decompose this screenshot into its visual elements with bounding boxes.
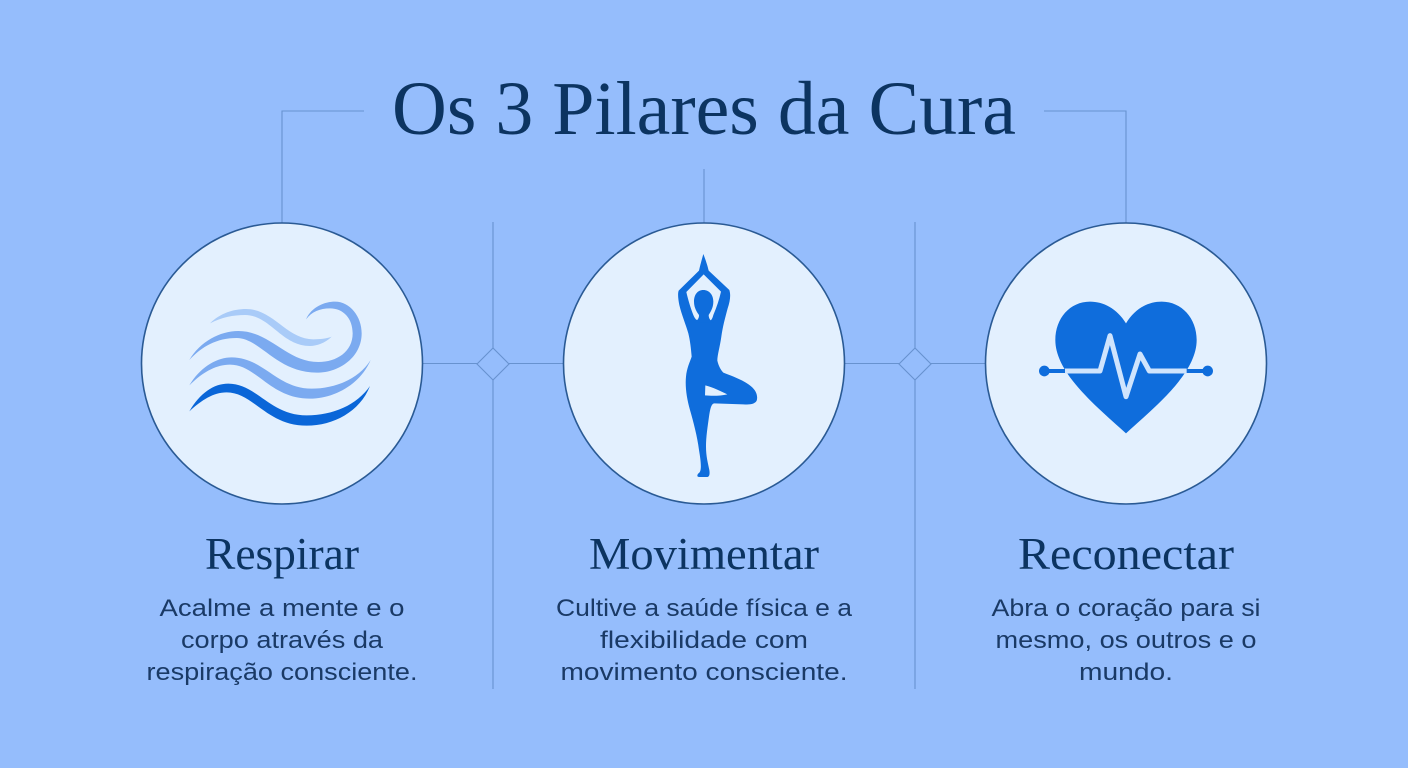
heading: Movimentar: Movimentar <box>589 529 819 579</box>
circle: Reconectar <box>986 223 1266 504</box>
title: Os 3 Pilares da Cura <box>392 67 1016 151</box>
text: Respirar description: Acalme a mente e o <box>160 595 404 622</box>
text: Reconectar description: Abra o coração para si <box>992 595 1260 622</box>
text: Movimentar description: flexibilidade com <box>600 627 808 654</box>
text: Reconectar description <box>992 595 1260 686</box>
text: Respirar description: corpo através da <box>181 627 384 654</box>
text: Movimentar description: Cultive a saúde física e a <box>556 595 853 622</box>
circle: Respirar <box>142 223 422 504</box>
diamond: left divider <box>477 348 509 380</box>
text: Reconectar description: mesmo, os outros e o <box>996 627 1256 654</box>
panel: Respirar <box>142 223 422 686</box>
heading: Respirar: Respirar <box>205 529 359 579</box>
circle: Movimentar <box>564 223 844 504</box>
panel: Movimentar <box>556 223 853 686</box>
heading: Reconectar: Reconectar <box>1018 529 1234 579</box>
text: Movimentar description: movimento consciente. <box>560 659 848 686</box>
text: Respirar description: respiração consciente. <box>146 659 418 686</box>
icon: waves <box>189 302 371 426</box>
text: Respirar description <box>146 595 418 686</box>
connector lines <box>282 111 1126 689</box>
panel: Reconectar <box>986 223 1266 686</box>
icon: heart with pulse <box>1039 302 1213 433</box>
text: Reconectar description: mundo. <box>1079 659 1173 686</box>
text: Movimentar description <box>556 595 853 686</box>
icon: yoga tree pose <box>678 254 757 477</box>
diamond: right divider <box>899 348 931 380</box>
